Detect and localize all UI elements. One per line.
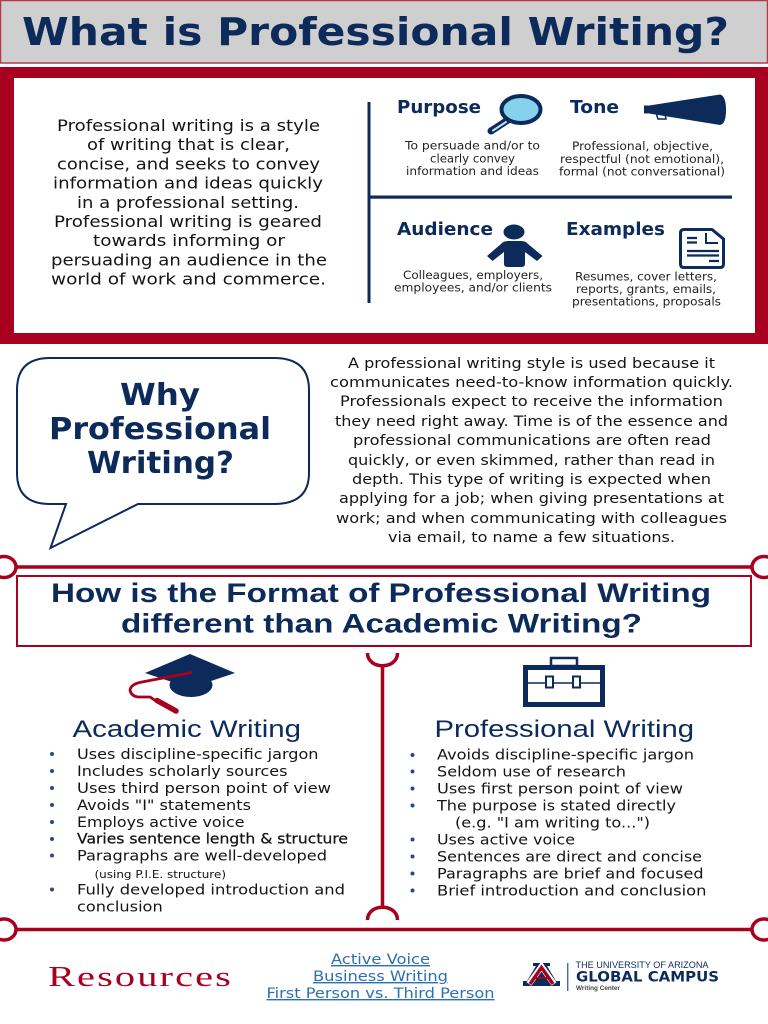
academic writing bullet list: Paragraphs are well-developed — [77, 848, 327, 864]
professional writing bullet list: Avoids discipline-specific jargon — [437, 748, 694, 764]
examples description: presentations, proposals — [572, 294, 721, 308]
column: academic writing — [50, 654, 348, 916]
definition text block: towards informing or — [93, 231, 285, 250]
title: What is Professional Writing? — [22, 10, 729, 54]
heading: tone: Tone — [570, 97, 619, 118]
logo: university of arizona global campus writing center — [523, 960, 719, 992]
logo: university of arizona global campus writing center: GLOBAL CAMPUS — [576, 970, 719, 986]
definition text block: concise, and seeks to convey — [57, 154, 320, 174]
purpose description — [404, 138, 540, 178]
purpose description: clearly convey — [430, 152, 515, 166]
definition text block: of writing that is clear, — [87, 135, 290, 154]
why professional writing paragraph — [330, 356, 733, 546]
professional writing bullet list: Seldom use of research — [437, 764, 626, 780]
quadrant: audience — [394, 219, 552, 294]
definition text block: information and ideas quickly — [53, 174, 323, 192]
academic writing bullet list: Fully developed introduction and — [77, 882, 345, 898]
professional writing bullet list: Brief introduction and conclusion — [437, 884, 706, 900]
definition text block: persuading an audience in the — [51, 250, 327, 270]
logo: university of arizona global campus writing center: THE UNIVERSITY OF ARIZONA — [576, 960, 709, 971]
heading box: format comparison: different than Academic Writing? — [121, 608, 642, 638]
why professional writing paragraph: communicates need-to-know information quickly. — [330, 375, 733, 391]
academic writing bullet list: Employs active voice — [77, 815, 245, 831]
heading: examples: Examples — [566, 219, 665, 240]
speech bubble: why professional writing — [17, 358, 309, 548]
audience description — [394, 268, 552, 294]
tone description: respectful (not emotional), — [560, 152, 724, 166]
icon: document — [680, 230, 724, 268]
academic writing bullet list: Includes scholarly sources — [77, 764, 288, 780]
definition text block: in a professional setting. — [77, 193, 299, 212]
heading box: format comparison: How is the Format of Professional Writing — [51, 578, 711, 608]
why professional writing paragraph: they need right away. Time is of the essence and — [335, 414, 728, 430]
definition text block: Professional writing is a style — [57, 116, 320, 135]
icon: briefcase — [526, 658, 602, 704]
resource links: First Person vs. Third Person — [266, 986, 494, 1002]
definition text block: world of work and commerce. — [51, 270, 326, 288]
icon: megaphone — [644, 94, 726, 125]
speech bubble: why professional writing: Professional — [49, 412, 271, 447]
examples description — [572, 270, 721, 308]
red divider bottom — [0, 919, 768, 940]
resource links — [266, 952, 494, 1002]
speech bubble: why professional writing: Writing? — [87, 446, 234, 481]
purpose description: information and ideas — [406, 164, 539, 178]
academic writing bullet list: Avoids "I" statements — [77, 798, 251, 814]
icon: graduation cap — [130, 654, 235, 711]
icon: block A — [523, 963, 560, 986]
heading box: format comparison — [17, 576, 751, 646]
heading: purpose: Purpose — [397, 97, 481, 118]
professional writing bullet list: Paragraphs are brief and focused — [437, 866, 704, 882]
professional writing bullet list: Uses active voice — [437, 832, 575, 848]
academic writing bullet list: Varies sentence length & structure — [77, 832, 348, 848]
quadrant: examples — [566, 219, 724, 308]
professional writing bullet list: Uses first person point of view — [437, 782, 683, 798]
definition text block: Professional writing is geared — [54, 212, 322, 231]
icon: magnifying glass — [491, 96, 540, 131]
definition text block — [51, 116, 327, 288]
quadrant: purpose — [397, 96, 540, 178]
professional writing bullet list — [410, 748, 706, 900]
column: professional writing — [410, 658, 706, 900]
why professional writing paragraph: professional communications are often read — [353, 433, 711, 449]
logo: university of arizona global campus writing center: Writing Center — [576, 985, 620, 992]
speech bubble: why professional writing: Why — [120, 378, 200, 413]
academic writing bullet list: (using P.I.E. structure) — [94, 869, 226, 881]
quadrant: tone — [559, 94, 726, 178]
professional writing bullet list: The purpose is stated directly — [436, 798, 676, 814]
panel: what is professional writing — [0, 67, 768, 344]
why professional writing paragraph: work; and when communicating with colleagues — [336, 511, 727, 527]
resource links: Business Writing — [313, 969, 448, 985]
heading: academic writing: Academic Writing — [72, 716, 301, 743]
tone description: formal (not conversational) — [559, 164, 725, 178]
why professional writing paragraph: quickly, or even skimmed, rather than read in — [348, 453, 715, 469]
tone description — [559, 139, 725, 178]
resources heading: Resources — [48, 961, 233, 993]
red divider top — [0, 556, 768, 578]
vertical red divider — [368, 653, 398, 920]
why professional writing paragraph: A professional writing style is used because it — [348, 356, 715, 372]
audience description: Colleagues, employers, — [403, 268, 543, 282]
academic writing bullet list: Uses discipline-specific jargon — [77, 747, 318, 763]
audience description: employees, and/or clients — [394, 280, 552, 294]
icon: person — [487, 224, 542, 267]
examples description: reports, grants, emails, — [576, 282, 716, 296]
why professional writing paragraph: depth. This type of writing is expected when — [352, 472, 711, 488]
why professional writing paragraph: Professionals expect to receive the information — [340, 394, 723, 410]
why professional writing paragraph: via email, to name a few situations. — [388, 530, 675, 546]
academic writing bullet list: Uses third person point of view — [77, 781, 331, 797]
heading: professional writing: Professional Writing — [434, 716, 694, 743]
professional writing bullet list: (e.g. "I am writing to...") — [455, 816, 650, 832]
academic writing bullet list — [50, 747, 348, 916]
resource links: Active Voice — [331, 952, 430, 968]
examples description: Resumes, cover letters, — [575, 270, 717, 284]
heading: audience: Audience — [397, 219, 493, 240]
purpose description: To persuade and/or to — [404, 138, 540, 152]
why professional writing paragraph: applying for a job; when giving presentations at — [339, 491, 724, 507]
title banner — [0, 0, 768, 63]
tone description: Professional, objective, — [572, 139, 713, 153]
academic writing bullet list: conclusion — [77, 900, 163, 916]
quadrant divider lines — [368, 102, 732, 303]
professional writing bullet list: Sentences are direct and concise — [437, 850, 702, 866]
